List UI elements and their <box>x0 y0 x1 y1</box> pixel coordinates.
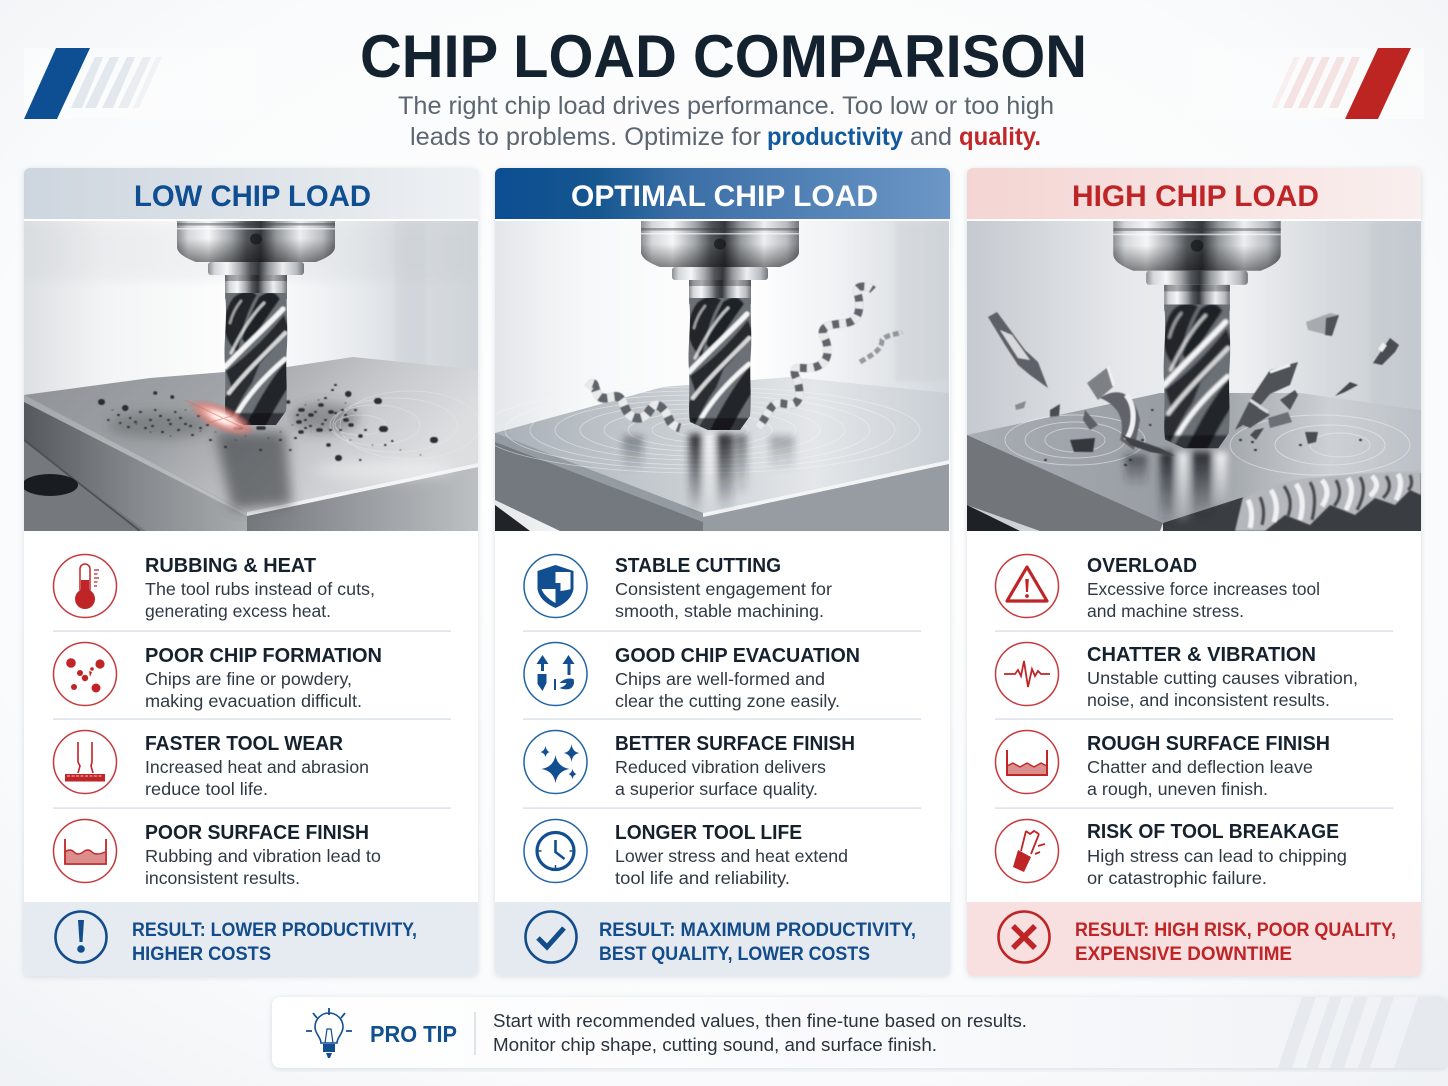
photo: tool with violent chips and gouged edge <box>967 204 1421 531</box>
row: risk of tool breakage <box>996 820 1347 888</box>
photo: tool with well-formed spiral chips <box>480 206 949 531</box>
subtitle: productivity <box>767 123 903 151</box>
text: rough surface finish <box>1087 733 1330 799</box>
text: result high: RESULT: HIGH RISK, POOR QUALITY, <box>1075 919 1396 941</box>
heading: high chip load <box>967 168 1421 219</box>
text: result optimal: RESULT: MAXIMUM PRODUCTIVITY, <box>599 919 916 941</box>
text: poor surface finish <box>145 822 381 888</box>
row: longer tool life <box>524 820 848 888</box>
row: better surface finish <box>524 730 855 799</box>
title: CHIP LOAD COMPARISON <box>360 23 1087 90</box>
row: faster tool wear <box>54 730 369 799</box>
text: good chip evacuation: clear the cutting zone easily. <box>615 691 840 711</box>
subtitle: The right chip load drives performance. Too low or too high <box>398 92 1054 120</box>
text: pro tip advice <box>493 1010 1027 1055</box>
label: pro tip: PRO TIP <box>370 1021 457 1047</box>
text: rubbing and heat <box>145 555 375 621</box>
text: poor surface finish: inconsistent results. <box>145 868 300 888</box>
text: overload: and machine stress. <box>1087 601 1244 621</box>
text: rubbing and heat: The tool rubs instead of cuts, <box>145 579 375 599</box>
text: chatter and vibration: noise, and inconsistent results. <box>1087 690 1330 710</box>
heading: low chip load: LOW CHIP LOAD <box>134 180 371 213</box>
decoration: left blue slash with stripes <box>24 48 324 119</box>
text: overload: OVERLOAD <box>1087 555 1197 577</box>
text: overload <box>1087 555 1320 621</box>
panel: optimal chip load <box>480 168 950 976</box>
text: stable cutting: Consistent engagement for <box>615 579 832 599</box>
photo: tool rubbing with powdery chips and sparks <box>22 201 480 531</box>
text: better surface finish: BETTER SURFACE FINISH <box>615 733 855 755</box>
text: risk of tool breakage: or catastrophic failure. <box>1087 868 1267 888</box>
icon: worn tool on block <box>54 730 116 794</box>
row: rough surface finish <box>996 730 1330 799</box>
text: result optimal <box>599 919 916 965</box>
text: risk of tool breakage <box>1087 821 1347 888</box>
icon: check mark <box>526 912 576 962</box>
text: good chip evacuation <box>615 645 860 711</box>
heading: optimal chip load: OPTIMAL CHIP LOAD <box>571 180 878 213</box>
result: maximum productivity <box>495 902 950 976</box>
text: overload: Excessive force increases tool <box>1087 579 1320 599</box>
text: chatter and vibration: CHATTER & VIBRATION <box>1087 644 1316 666</box>
text: pro tip advice: Start with recommended values, then fine-tune based on results. <box>493 1010 1027 1031</box>
text: rubbing and heat: RUBBING & HEAT <box>145 555 316 577</box>
panel: high chip load <box>967 168 1421 976</box>
heading: high chip load: HIGH CHIP LOAD <box>1072 180 1319 213</box>
text: rough surface finish: a rough, uneven finish. <box>1087 779 1268 799</box>
text: longer tool life: LONGER TOOL LIFE <box>615 822 802 844</box>
icon: rough surface in box <box>54 820 116 882</box>
icon: chips with upward arrows <box>524 642 587 706</box>
text: risk of tool breakage: RISK OF TOOL BREAKAGE <box>1087 821 1339 843</box>
result: lower productivity <box>24 902 478 976</box>
text: result low: HIGHER COSTS <box>132 943 271 965</box>
icon: exclamation <box>56 912 106 962</box>
icon: X mark <box>998 912 1050 962</box>
icon: sparkles <box>524 730 587 794</box>
subtitle <box>398 92 1054 151</box>
row: stable cutting <box>524 554 832 621</box>
text: poor chip formation: Chips are fine or powdery, <box>145 669 352 689</box>
text: better surface finish: Reduced vibration delivers <box>615 757 826 777</box>
text: longer tool life: Lower stress and heat extend <box>615 846 848 866</box>
row: rubbing and heat <box>54 554 375 621</box>
text: result low: RESULT: LOWER PRODUCTIVITY, <box>132 919 417 941</box>
text: stable cutting <box>615 555 832 621</box>
text: stable cutting: smooth, stable machining. <box>615 601 824 621</box>
text: poor chip formation: making evacuation difficult. <box>145 691 362 711</box>
text: poor chip formation <box>145 645 382 711</box>
text: longer tool life: tool life and reliability. <box>615 868 790 888</box>
icon: vibration pulse <box>996 642 1058 706</box>
icon: warning triangle <box>996 554 1058 618</box>
subtitle: leads to problems. Optimize for <box>410 123 761 151</box>
text: rough surface finish: ROUGH SURFACE FINISH <box>1087 733 1330 755</box>
icon: shield <box>524 554 587 618</box>
row: chatter and vibration <box>996 642 1358 710</box>
text: better surface finish: a superior surface quality. <box>615 779 818 799</box>
text: poor chip formation: POOR CHIP FORMATION <box>145 645 382 667</box>
text: faster tool wear: Increased heat and abrasion <box>145 757 369 777</box>
icon: thermometer <box>54 554 116 618</box>
row: poor surface finish <box>54 820 381 888</box>
decoration: right red slash with stripes <box>1124 48 1424 119</box>
icon: broken tool <box>996 820 1058 882</box>
subtitle: quality. <box>959 123 1041 151</box>
text: result high <box>1075 919 1396 965</box>
text: longer tool life <box>615 822 848 888</box>
text: result low <box>132 919 417 965</box>
text: good chip evacuation: GOOD CHIP EVACUATION <box>615 645 860 667</box>
text: faster tool wear <box>145 733 369 799</box>
text: risk of tool breakage: High stress can lead to chipping <box>1087 846 1347 866</box>
text: poor surface finish: POOR SURFACE FINISH <box>145 822 369 844</box>
text: result high: EXPENSIVE DOWNTIME <box>1075 943 1292 965</box>
text: chatter and vibration: Unstable cutting causes vibration, <box>1087 668 1358 688</box>
row: overload <box>996 554 1320 621</box>
row: poor chip formation <box>54 642 382 711</box>
icon: light bulb <box>306 1008 352 1058</box>
result: high risk <box>967 902 1421 976</box>
text: pro tip advice: Monitor chip shape, cutting sound, and surface finish. <box>493 1034 937 1055</box>
panel: pro tip <box>272 997 1448 1068</box>
heading: optimal chip load <box>495 168 950 219</box>
text: faster tool wear: reduce tool life. <box>145 779 268 799</box>
text: faster tool wear: FASTER TOOL WEAR <box>145 733 344 755</box>
text: better surface finish <box>615 733 855 799</box>
icon: scattered chips <box>54 642 116 706</box>
text: chatter and vibration <box>1087 644 1358 710</box>
text: poor surface finish: Rubbing and vibration lead to <box>145 846 381 866</box>
text: rubbing and heat: generating excess heat. <box>145 601 331 621</box>
icon: clock <box>524 820 587 882</box>
text: result optimal: BEST QUALITY, LOWER COSTS <box>599 943 870 965</box>
subtitle: and <box>910 123 952 151</box>
text: rough surface finish: Chatter and deflection leave <box>1087 757 1313 777</box>
icon: rough surface in box <box>996 730 1058 794</box>
text: stable cutting: STABLE CUTTING <box>615 555 781 577</box>
heading: low chip load <box>24 168 478 219</box>
panel: low chip load <box>22 168 480 976</box>
row: good chip evacuation <box>524 642 860 711</box>
text: good chip evacuation: Chips are well-formed and <box>615 669 825 689</box>
